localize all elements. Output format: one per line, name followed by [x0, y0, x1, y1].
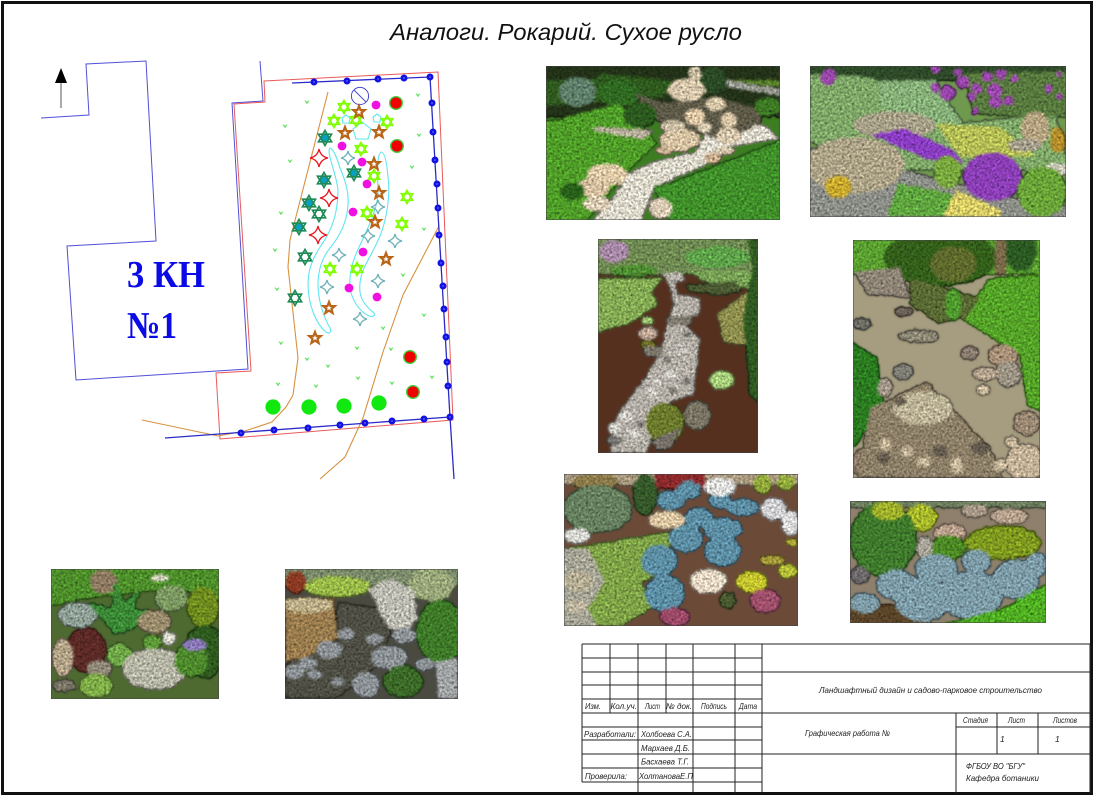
photo: dry stream with mulch [591, 235, 763, 453]
organisation [966, 761, 1039, 783]
column headers [585, 701, 757, 711]
stage and sheet headers [963, 715, 1077, 744]
photo: gravel stream with lawn [847, 229, 1047, 483]
brown star plants [309, 106, 392, 343]
authors: Разработали: [584, 729, 637, 739]
work title: Графическая работа № [805, 728, 890, 738]
rock pentagons [342, 114, 381, 139]
organisation: ФГБОУ ВО "БГУ" [966, 761, 1026, 771]
photo: blue fescue on bark mulch [555, 468, 802, 632]
red four-point stars [309, 149, 338, 244]
stage and sheet headers: 1 [1000, 734, 1005, 744]
building label: №1 [127, 305, 177, 347]
column headers: Изм. [585, 701, 601, 711]
authors: Мархаев Д.Б. [641, 743, 690, 753]
stage and sheet headers: 1 [1055, 734, 1060, 744]
green shrubs [265, 395, 387, 415]
column headers: Кол.уч. [610, 701, 637, 711]
title: Аналоги. Рокарий. Сухое русло [388, 19, 742, 45]
building outline [41, 61, 263, 380]
building label [127, 254, 205, 347]
photo: rock garden with white gravel stream and lawn [540, 60, 788, 223]
magenta flowers [338, 101, 381, 301]
grey-teal four-point stars [320, 151, 402, 326]
photo: conifer and blue fescue [845, 498, 1051, 628]
photo: dry stream with pebbles [277, 565, 466, 699]
stage and sheet headers: Листов [1052, 715, 1077, 725]
dry stream beds [308, 148, 389, 333]
photo: rockery with iris and stones [44, 565, 225, 699]
north arrow [55, 68, 67, 108]
authors: Холбоева С.А. [640, 729, 692, 739]
paths [142, 92, 439, 479]
authors: Проверила: [585, 771, 628, 781]
speciality: Ландшафтный дизайн и садово-парковое строительство [818, 685, 1042, 695]
authors: ХолтановаЕ.П [638, 771, 694, 781]
stage and sheet headers: Стадия [963, 715, 988, 725]
column headers: Лист [644, 701, 660, 711]
lamps [238, 74, 453, 436]
site plan [41, 61, 454, 479]
authors: Басхаева Т.Г. [641, 756, 689, 766]
title block grid [582, 644, 1090, 793]
forbidden sign [351, 87, 369, 105]
lime star plants [324, 100, 413, 276]
stage and sheet headers: Лист [1007, 715, 1025, 725]
photo: alpine garden with purple flowers [805, 60, 1073, 223]
grass marks [273, 94, 434, 388]
building label: 3 КН [127, 254, 205, 296]
plot boundary [216, 72, 453, 439]
column headers: Дата [738, 701, 757, 711]
title block [582, 644, 1090, 793]
authors [584, 729, 694, 781]
teal star conifers [288, 130, 360, 306]
red shrubs [389, 96, 420, 399]
lighting line [165, 77, 454, 479]
column headers: № док. [666, 701, 692, 711]
column headers: Подпись [701, 701, 727, 711]
organisation: Кафедра ботаники [966, 773, 1039, 783]
